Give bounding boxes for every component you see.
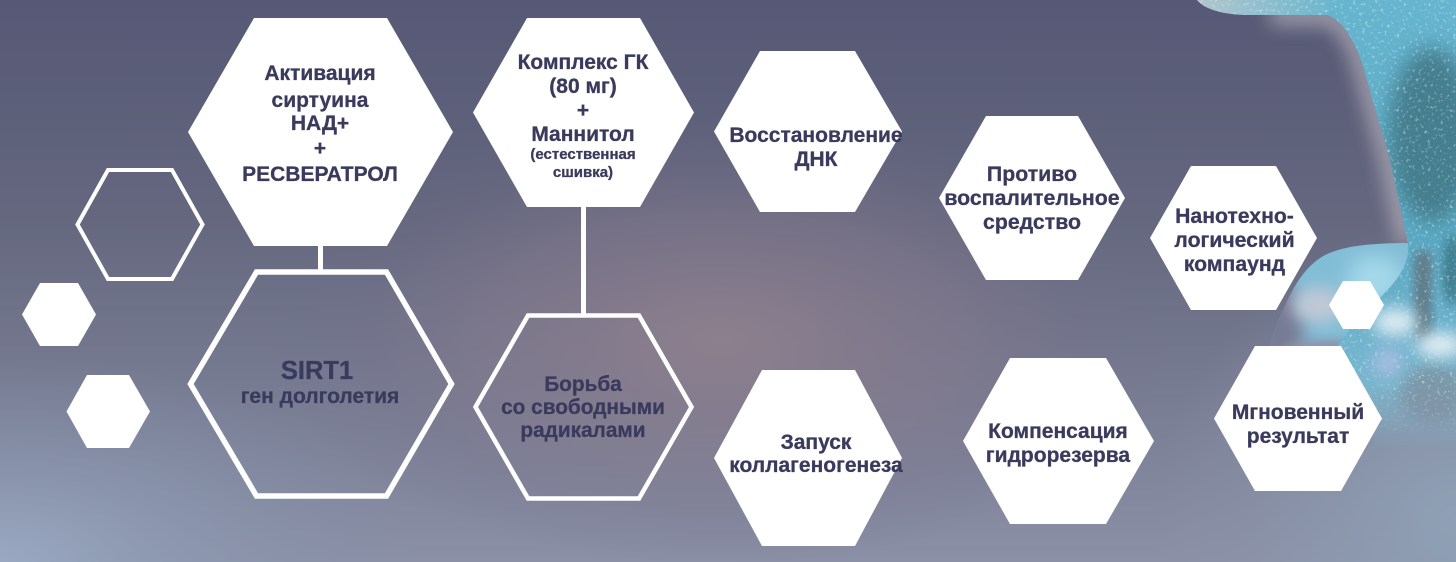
label: fighting free radicals: Борьба <box>544 373 622 396</box>
hexagon: nanotech compound <box>1150 166 1317 310</box>
hexagon: hydroreserve compensation <box>963 358 1154 524</box>
decorative white hexagon lower <box>66 375 150 448</box>
label: fighting free radicals: радикалами <box>520 419 646 442</box>
label: natural crosslink: (естественная <box>530 146 636 163</box>
decorative white hexagon upper <box>22 283 96 346</box>
hexagon: instant result <box>1214 346 1382 491</box>
label: sirtuin activation: + <box>314 137 326 160</box>
label: DNA repair: Восстановление <box>729 124 903 147</box>
label: anti-inflammatory: средство <box>983 210 1081 234</box>
connector: hyaluronic complex to free radicals <box>581 206 586 315</box>
label: nanotech compound: компаунд <box>1184 253 1286 276</box>
label: fighting free radicals: со свободными <box>501 396 665 419</box>
label: collagenogenesis: коллагеногенеза <box>729 454 903 477</box>
decorative outline hexagon <box>78 170 202 279</box>
label: natural crosslink: сшивка) <box>553 164 613 181</box>
label: hydroreserve compensation: гидрорезерва <box>986 444 1130 467</box>
label: sirtuin activation: Активация <box>264 62 376 85</box>
label: hydroreserve compensation: Компенсация <box>988 420 1128 443</box>
image: water splash <box>1197 0 1456 434</box>
connector: resveratrol to SIRT1 <box>318 245 323 272</box>
label: complex and mannitol: + <box>577 99 589 122</box>
hexagon: DNA repair <box>714 51 903 212</box>
label: sirtuin activation: РЕСВЕРАТРОЛ <box>242 163 398 186</box>
label: SIRT1: SIRT1 <box>281 357 353 385</box>
label: complex and mannitol: (80 мг) <box>549 75 617 98</box>
hexagon: sirtuin activation <box>188 18 453 246</box>
label: nanotech compound: Нанотехно- <box>1175 205 1294 228</box>
label: anti-inflammatory: воспалительное <box>944 186 1120 210</box>
hexagon: fighting free radicals <box>476 316 692 498</box>
label: sirtuin activation: НАД+ <box>291 112 349 135</box>
label: instant result: Мгновенный <box>1232 401 1364 424</box>
label: anti-inflammatory: Противо <box>987 162 1077 186</box>
hexagon: SIRT1 longevity gene <box>190 272 452 496</box>
label: sirtuin activation: сиртуина <box>272 89 369 112</box>
hexagon: anti-inflammatory <box>939 116 1125 280</box>
hexagon: collagenogenesis <box>714 370 903 546</box>
label: complex and mannitol: Маннитол <box>531 123 635 146</box>
decorative small white hexagon on water <box>1329 281 1384 329</box>
label: DNA repair: ДНК <box>795 148 838 171</box>
label: instant result: результат <box>1247 425 1349 448</box>
label: collagenogenesis: Запуск <box>781 431 852 454</box>
label: nanotech compound: логический <box>1174 229 1295 252</box>
label: longevity gene: ген долголетия <box>241 385 399 408</box>
label: complex and mannitol: Комплекс ГК <box>518 51 649 74</box>
hexagon: hyaluronic complex and mannitol <box>473 18 694 207</box>
